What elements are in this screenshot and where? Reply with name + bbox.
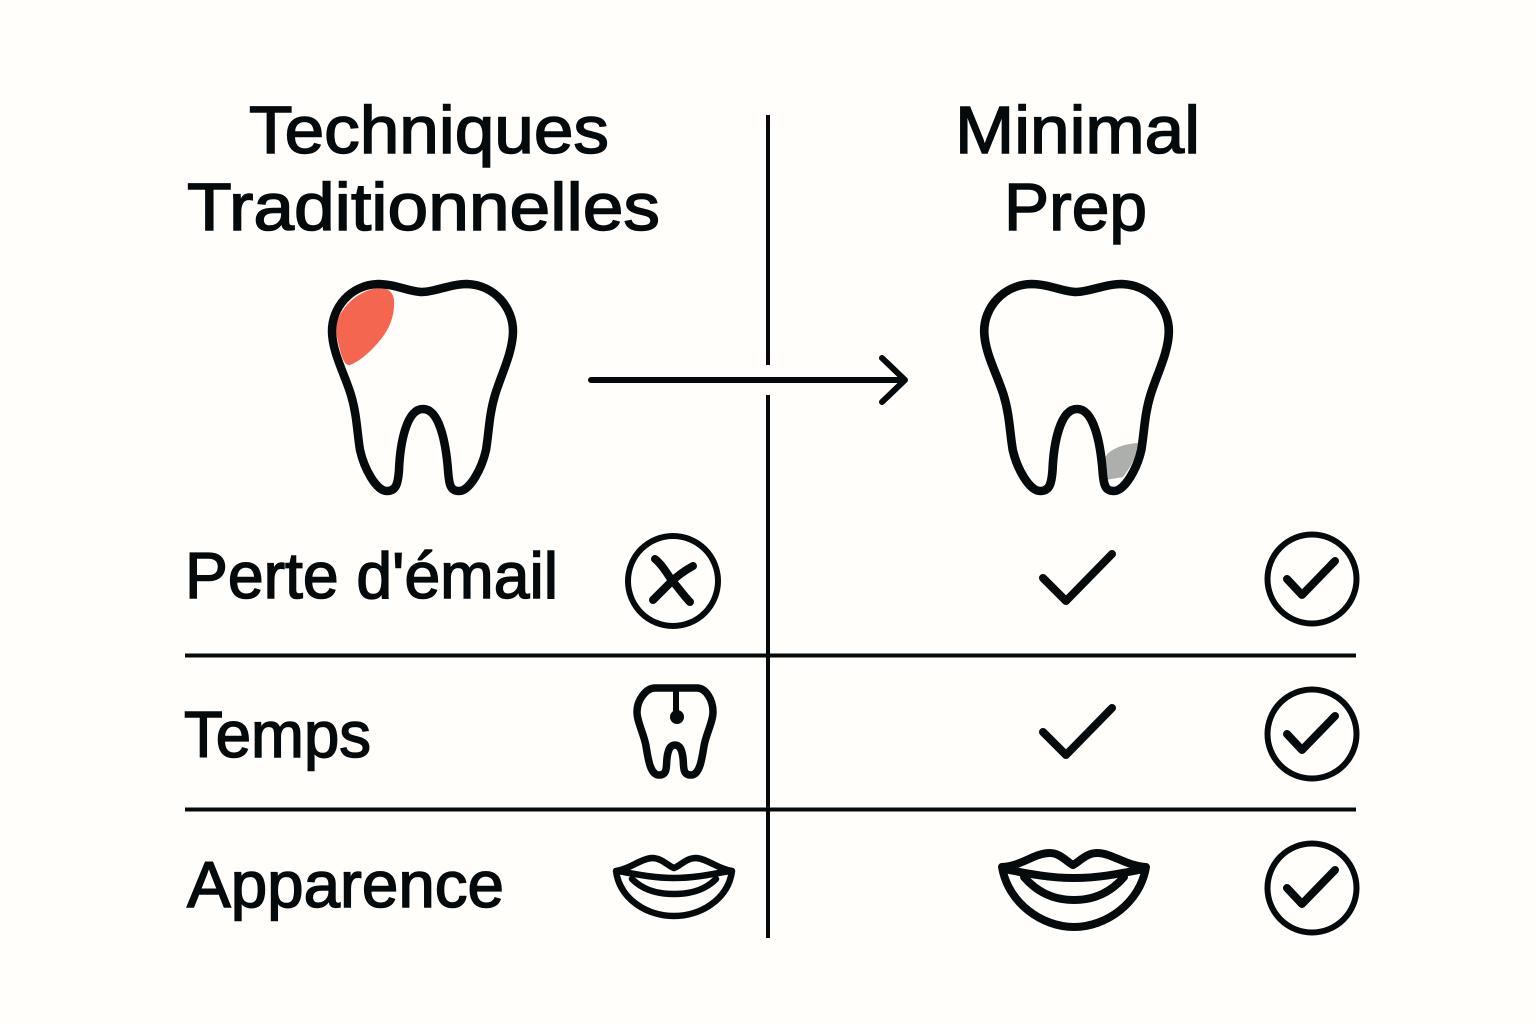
center divider: [766, 115, 770, 938]
row label: appearance: Apparence: [187, 848, 504, 921]
icon: tooth with small grey mark: [984, 284, 1169, 491]
icon: cross in circle: [628, 536, 718, 626]
heading: minimal prep: Minimal: [955, 93, 1200, 168]
icon: check in circle, row 3: [1268, 844, 1356, 932]
heading: traditional techniques: Techniques: [249, 93, 609, 168]
icon: standalone check, row 2: [1043, 708, 1112, 755]
heading: traditional techniques: [187, 93, 660, 245]
heading: minimal prep: Prep: [1004, 170, 1147, 245]
icon: lips, minimal prep: [1002, 853, 1146, 927]
heading: traditional techniques: Traditionnelles: [187, 170, 660, 245]
icon: lips, traditional: [616, 858, 732, 916]
icon: standalone check, row 1: [1043, 554, 1112, 601]
row label: enamel loss: Perte d'émail: [185, 539, 558, 612]
icon: check in circle, row 2: [1268, 690, 1356, 778]
heading: minimal prep: [955, 93, 1200, 245]
icon: check in circle, row 1: [1268, 534, 1356, 624]
row label: time: Temps: [184, 698, 371, 771]
row separators: [185, 656, 1356, 810]
icon: tooth with red damage: [332, 284, 513, 491]
icon: tooth with pulp canal: [637, 688, 713, 775]
arrow: [591, 358, 905, 402]
